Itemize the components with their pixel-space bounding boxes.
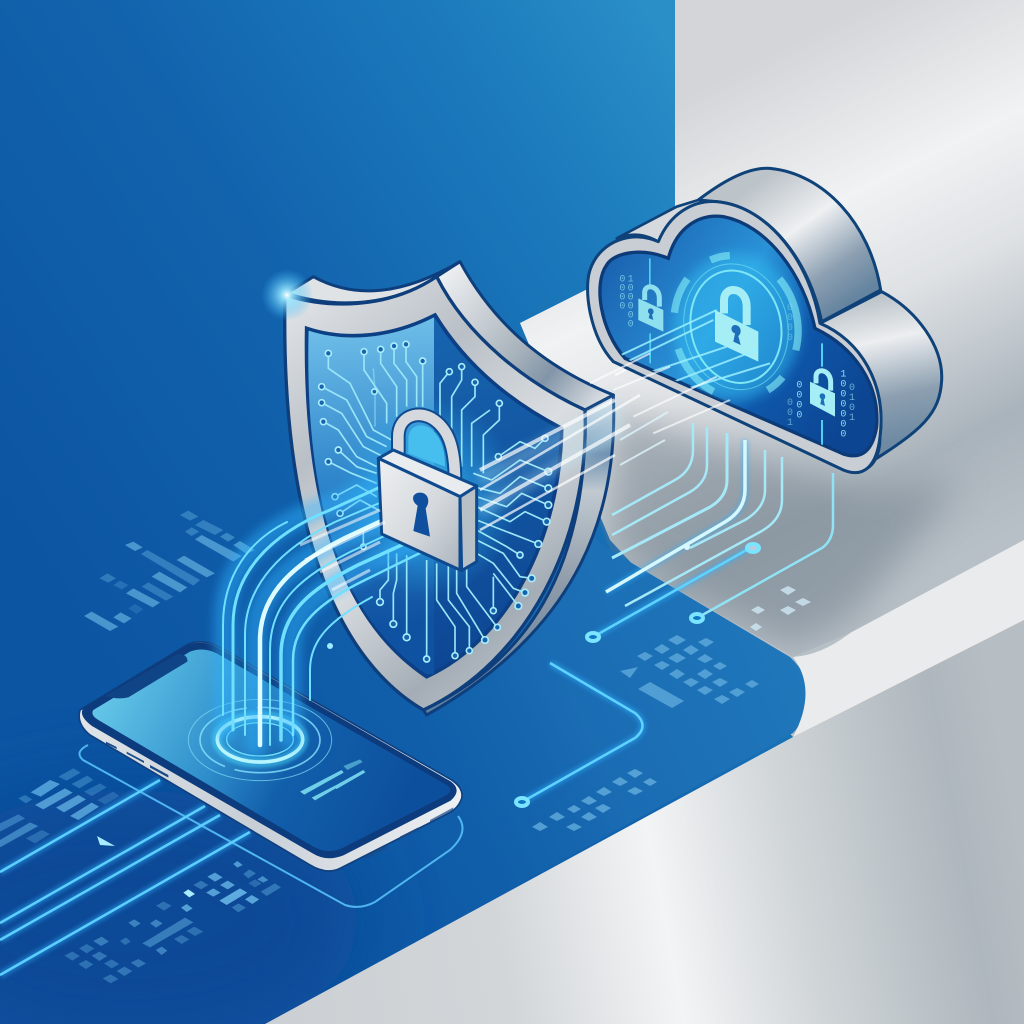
data stream: phone to lock [223,478,428,745]
cloud inner content [603,244,855,450]
concentric rings [188,699,332,781]
node [684,544,690,550]
binary digits: 0 [619,301,625,312]
binary digits: 1 [840,369,846,380]
binary digits: 0 [849,402,855,413]
grey shadow panel under cloud [610,410,960,650]
binary digits: 0 [628,292,634,303]
data blocks: lower right floor [532,769,657,831]
circuit traces [322,345,548,658]
binary digits: 0 [619,292,625,303]
binary digits: 1 [787,417,793,428]
shield top right bevel [437,262,613,410]
node [747,544,759,552]
trace: faint grey ledge dashes [620,412,668,465]
binary digits: 0 [796,400,802,411]
rings [670,252,802,395]
cloud descending traces [606,423,782,606]
shackle [398,415,455,482]
background: grey wall and ledge [520,0,1024,737]
cloud top left bevel [617,200,717,242]
cloud front frame [588,202,881,473]
cloud [588,168,942,473]
data blocks: upper left [84,511,255,631]
data blocks: on grey ledge [750,586,811,631]
binary digits: 1 [628,274,634,285]
binary digits: 0 [628,310,634,321]
data blocks: bottom [64,861,281,983]
binary digits: 1 [849,392,855,403]
cloud large back extrusion [698,168,881,322]
binary digits: 0 [796,410,802,421]
shield inner panel [307,315,562,677]
shield [285,262,614,715]
lock body side [460,486,477,571]
shield side extrusion [423,395,614,715]
top-left shield spark [261,269,313,321]
shield inner light half [308,317,434,674]
binary digits: 0 [619,283,625,294]
lock body front [378,458,460,570]
node [587,633,599,641]
phone bezel [82,643,457,858]
trace: shield to lower node [522,663,642,802]
phone screen [92,650,450,851]
trace: node to upper node [593,548,750,637]
lower-left floor shading [0,790,360,1024]
beams over shield frame [300,510,385,590]
padlock [378,415,477,571]
floor line glow [0,440,750,975]
right cloud lock [810,371,835,417]
beams over cloud frame [590,353,730,433]
phone notch [105,653,187,698]
binary digits: 0 [628,319,634,330]
binary digits: 0 [840,429,846,440]
stream glow [225,480,420,745]
left cloud lock [638,287,663,332]
data blocks: right of shield [620,635,759,708]
binary digits: 0 [840,389,846,400]
blue floor [0,420,809,1024]
shield front frame [285,277,585,710]
beams in cloud [621,309,770,388]
shackle highlight [398,415,455,482]
beams: shield to cloud [480,315,735,530]
circuit nodes [319,341,552,662]
silver foreground floor [265,620,1024,1024]
data blocks: lower left [0,768,119,847]
beam lines [480,315,735,530]
binary digits: 0 [796,390,802,401]
binary digits: 0 [787,302,793,313]
stream node [327,643,333,649]
screen text bars [300,759,365,800]
keyhole [413,493,430,537]
floor nodes [516,544,759,806]
binary digits: 0 [619,274,625,285]
binary digits: 0 [787,407,793,418]
binary digits: 0 [787,332,793,343]
binary digits: 0 [787,397,793,408]
center cloud lock [715,290,758,362]
shield top left bevel [287,262,460,303]
trace: phone shadow outline [79,745,462,907]
phone [79,642,462,871]
trace: node up to cloud [697,473,833,618]
node [691,614,703,622]
light ledge strip [793,540,1024,737]
binary digits: 0 [628,283,634,294]
cloud inner panel [600,216,877,456]
lock body top [378,450,477,497]
binary digits: 0 [787,312,793,323]
small triangle marker [97,836,115,846]
lock halo [337,397,517,597]
node [516,798,528,806]
floor circuit traces [0,412,833,975]
binary digits: 0 [849,382,855,393]
beam glow [480,405,625,510]
binary digits: 0 [787,322,793,333]
binary digits: 0 [628,301,634,312]
binary digits: 0 [840,409,846,420]
phone body [79,642,462,871]
vertical glow bars [649,258,823,450]
lower left light lines [0,780,250,975]
side buttons and ports [106,742,453,859]
stream lines [223,478,428,745]
binary digits: 0 [840,419,846,430]
shackle opening [408,425,445,467]
lock halo [673,253,800,400]
cloud small back extrusion [820,292,942,471]
binary digits: 0 [840,379,846,390]
binary digits: 0 [796,380,802,391]
binary digits [619,274,855,440]
binary digits: 0 [840,399,846,410]
binary digits: 1 [849,412,855,423]
